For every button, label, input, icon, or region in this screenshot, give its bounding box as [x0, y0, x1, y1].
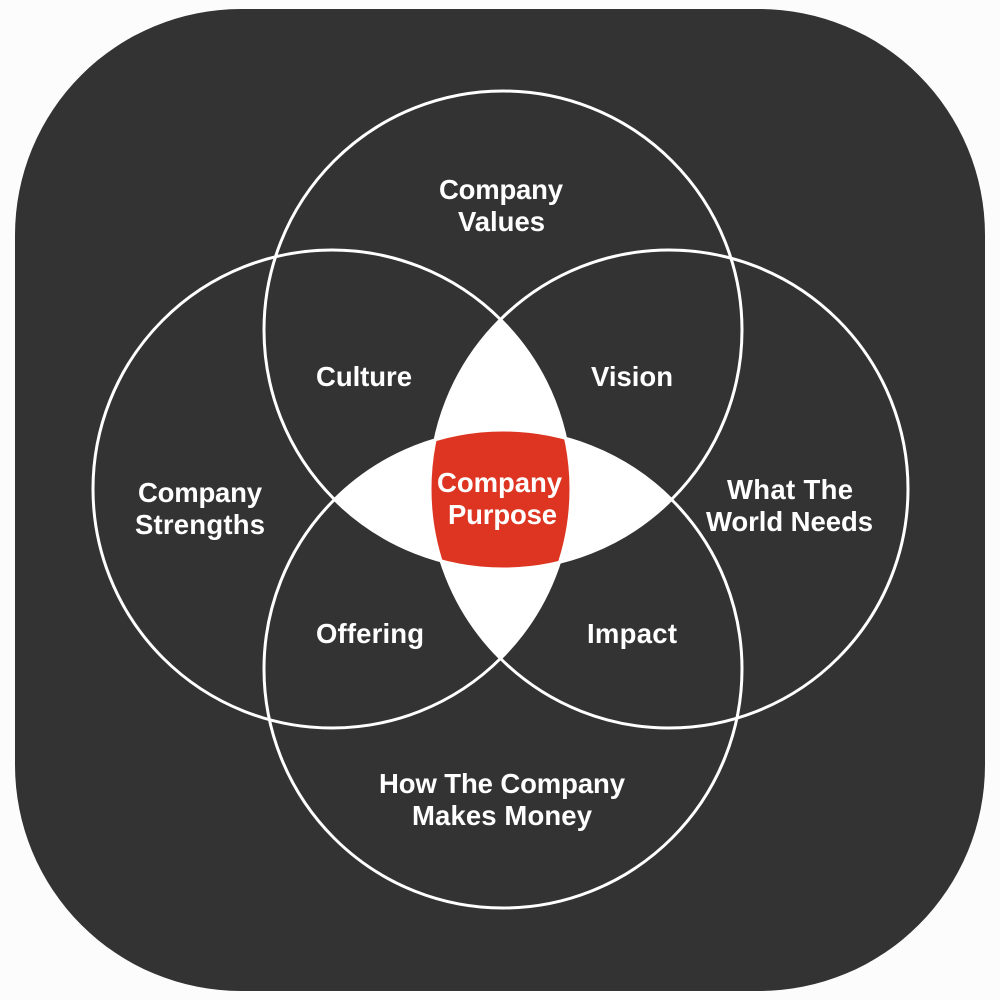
circle: how the company makes money [264, 430, 742, 908]
label: company values: Company [439, 174, 564, 205]
label: company strengths: Company [138, 477, 263, 508]
central red overlap [432, 432, 570, 568]
label: how the company makes money: Makes Money [412, 800, 593, 831]
label: company purpose: Purpose [448, 499, 557, 530]
horizontal white lens [336, 440, 670, 560]
circle: company strengths [93, 250, 571, 728]
venn diagram [93, 91, 908, 908]
label: how the company makes money [379, 768, 626, 831]
label: company values: Values [458, 206, 545, 237]
circle: what the world needs [430, 250, 908, 728]
label: culture: Culture [316, 361, 412, 392]
circle: company values [264, 91, 742, 569]
label: what the world needs [706, 474, 873, 537]
label: company strengths: Strengths [135, 509, 265, 540]
label: vision: Vision [591, 361, 673, 392]
vertical white lens [437, 322, 564, 656]
label: offering: Offering [316, 618, 424, 649]
label: how the company makes money: How The Company [379, 768, 626, 799]
label: company purpose: Company [437, 467, 563, 498]
label: company values [439, 174, 564, 237]
label: what the world needs: What The [727, 474, 853, 505]
label: impact: Impact [587, 618, 677, 649]
label: company strengths [135, 477, 265, 540]
label: what the world needs: World Needs [706, 506, 873, 537]
label: company purpose [437, 467, 563, 530]
